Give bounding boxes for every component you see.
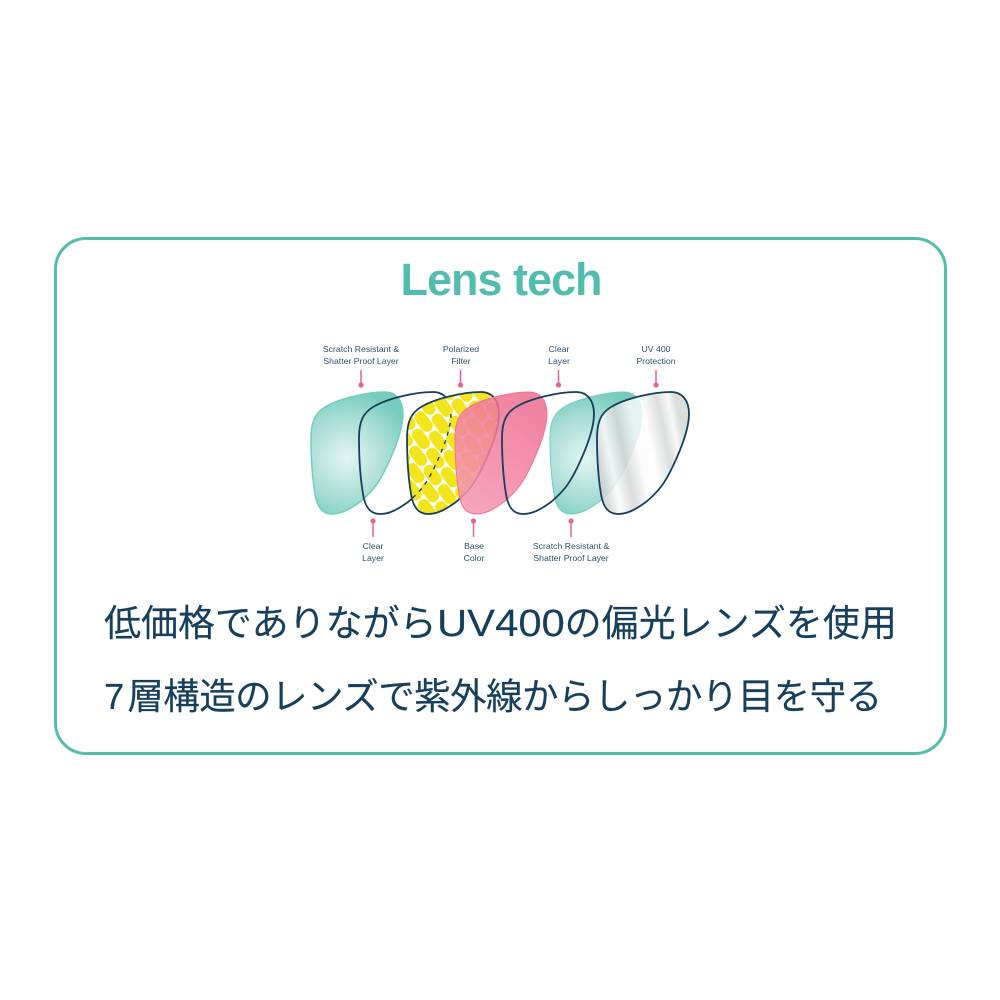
bottom pointers <box>370 518 574 537</box>
top labels: Layer <box>548 356 570 366</box>
lens: UV 400 protection <box>597 392 689 514</box>
lens: clear layer 2 <box>502 392 594 514</box>
text: first feature line: 低価格でありながら の偏光レンズを使用 <box>104 603 897 644</box>
bottom labels: Scratch Resistant & <box>533 541 609 551</box>
top labels: Polarized <box>443 344 479 354</box>
lens: scratch resistant layer <box>311 392 403 514</box>
top pointers <box>358 370 659 388</box>
top labels <box>323 344 676 366</box>
top labels: Protection <box>636 356 676 366</box>
lens layers diagram <box>310 344 690 563</box>
top labels: UV 400 <box>642 344 671 354</box>
text: second feature line: 7層構造のレンズで紫外線からしっかり目を守る <box>104 676 882 717</box>
bottom labels: Layer <box>362 553 384 563</box>
bottom labels: Color <box>464 553 484 563</box>
bottom labels <box>362 541 609 563</box>
top labels: Scratch Resistant & <box>323 344 399 354</box>
lens: polarized filter <box>407 392 499 514</box>
lens: clear layer <box>359 392 451 514</box>
top labels: Filter <box>451 356 471 366</box>
bottom labels: Clear <box>363 541 383 551</box>
title: Lens tech <box>400 254 602 304</box>
top labels: Clear <box>549 344 569 354</box>
bottom labels: Base <box>464 541 484 551</box>
lens: base color <box>455 392 547 514</box>
lens: UV outline <box>597 392 689 514</box>
panel: lens tech card <box>54 237 946 755</box>
clear layer dashed edge over filter <box>408 414 451 502</box>
bottom labels: Shatter Proof Layer <box>533 553 609 563</box>
text: first feature line: UV400 <box>437 603 564 645</box>
lens: scratch resistant layer 2 <box>550 392 642 514</box>
top labels: Shatter Proof Layer <box>323 356 399 366</box>
